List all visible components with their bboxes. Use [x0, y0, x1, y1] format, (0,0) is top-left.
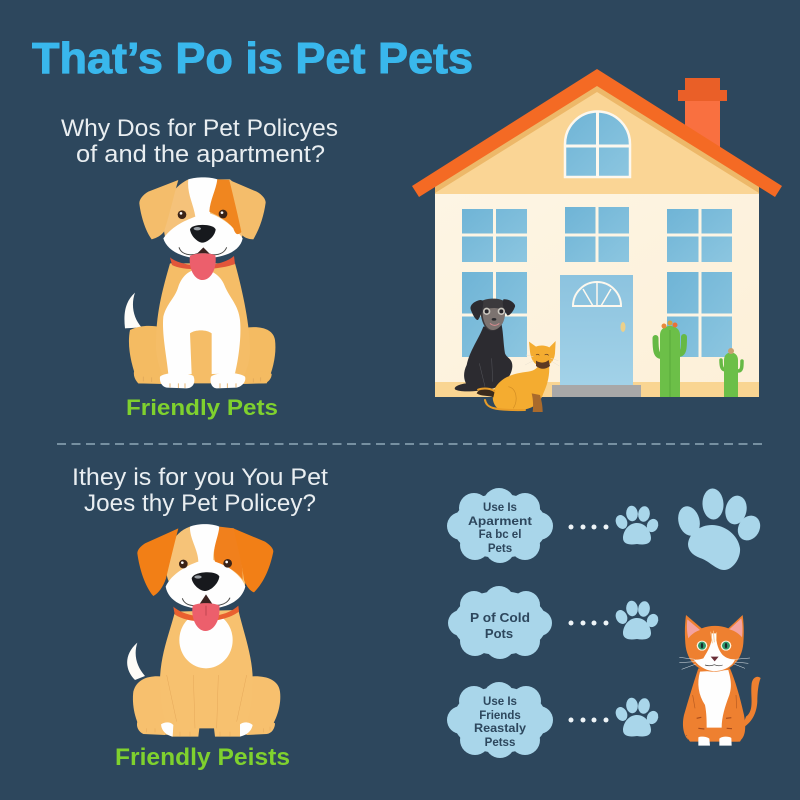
windows upper row — [462, 207, 732, 262]
cat on porch — [477, 341, 559, 412]
cloud: Use Is Apartment: Aparment — [468, 516, 532, 528]
heading: second question — [72, 464, 328, 517]
title: That’s Po is Pet Pets — [32, 34, 473, 83]
cloud: Use Is Friends: Petss — [485, 737, 515, 749]
connector dots 3 — [568, 718, 608, 722]
chimney — [678, 78, 727, 149]
icon: small paw 2 — [613, 600, 660, 639]
illustration: orange cat — [679, 615, 761, 746]
heading: first question — [61, 115, 338, 168]
illustration: house — [412, 69, 782, 412]
windows lower row — [462, 272, 732, 357]
icon: small paw 1 — [613, 505, 660, 544]
connector dots 1 — [568, 524, 608, 530]
cloud: Use Is Friends: Friends — [479, 710, 521, 722]
cloud: Use Is Apartment — [447, 488, 553, 563]
cloud: Use Is Apartment: Fa bc el — [479, 529, 521, 541]
heading: first question: of and the apartment? — [76, 141, 325, 168]
illustration: bottom dog — [127, 524, 280, 737]
heading: second question: Ithey is for you You Pet — [72, 464, 328, 491]
cactus small — [721, 348, 742, 397]
cloud: Use Is Friends: Use Is — [483, 696, 517, 708]
cloud: Use Is Apartment: Use Is — [483, 502, 517, 514]
cactus large — [656, 320, 684, 397]
door step — [552, 385, 641, 397]
cloud: Use Is Friends — [447, 682, 553, 758]
walls — [435, 193, 759, 397]
roof — [412, 69, 782, 197]
label: Friendly Peists: Friendly Peists — [115, 744, 290, 771]
illustration: top dog — [124, 177, 275, 388]
heading: first question: Why Dos for Pet Policyes — [61, 115, 338, 142]
gable — [435, 84, 759, 194]
attic window — [565, 112, 630, 177]
icon: small paw 3 — [613, 697, 660, 736]
cloud: P of Cold: P of Cold — [470, 610, 530, 625]
label: Friendly Pets: Friendly Pets — [126, 395, 278, 420]
door — [560, 275, 633, 385]
cloud: Use Is Friends: Reastaly — [474, 723, 527, 735]
dog on porch — [455, 299, 515, 391]
icon: large paw — [675, 488, 765, 570]
base strip — [435, 382, 759, 397]
cloud: Use Is Apartment: Pets — [488, 543, 512, 555]
cloud: P of Cold — [448, 586, 552, 659]
connector dots 2 — [568, 620, 608, 626]
heading: second question: Joes thy Pet Policey? — [84, 490, 316, 517]
divider — [57, 443, 765, 445]
cloud: P of Cold: Pots — [485, 626, 513, 641]
